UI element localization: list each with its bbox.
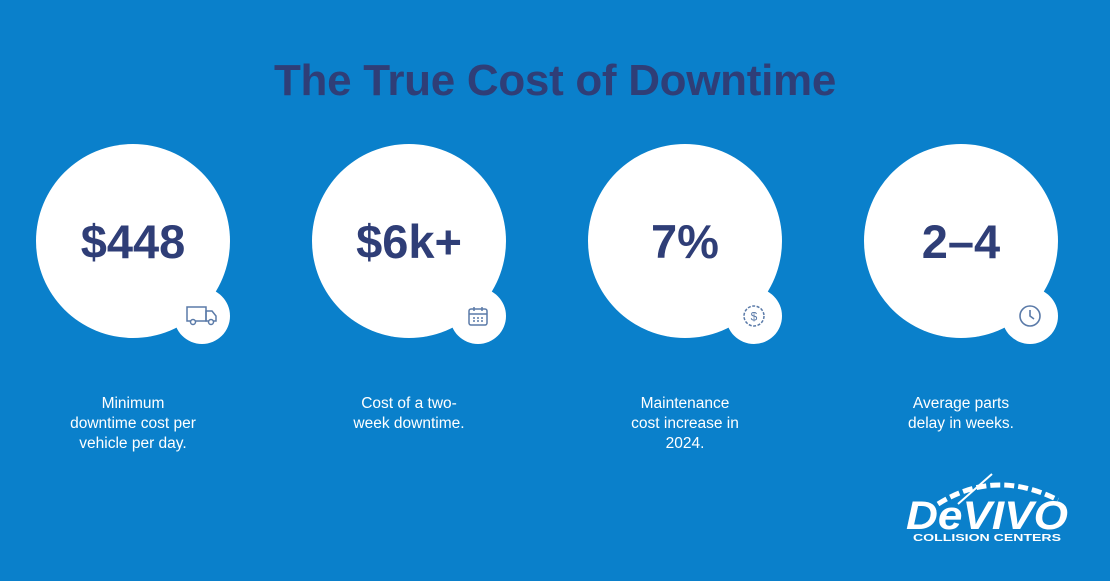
number circle bbox=[36, 144, 230, 338]
label: week downtime. bbox=[353, 415, 465, 432]
label: cost increase in bbox=[631, 415, 739, 432]
number circle: 7% bbox=[651, 214, 719, 268]
label: Maintenance bbox=[641, 395, 729, 412]
title: The True Cost of Downtime bbox=[274, 56, 836, 105]
number circle bbox=[864, 144, 1058, 338]
number circle bbox=[312, 144, 506, 338]
label bbox=[908, 395, 1014, 432]
logo: DeVIVO bbox=[906, 494, 1068, 538]
icon: dollar coin: $ bbox=[751, 310, 758, 324]
label bbox=[353, 395, 465, 432]
number circle: $448 bbox=[81, 214, 185, 268]
label bbox=[631, 395, 739, 452]
stat: 2-4 bbox=[864, 144, 1058, 432]
number circle: 2–4 bbox=[922, 214, 1000, 268]
number circle: $6k+ bbox=[356, 214, 462, 268]
label: Minimum bbox=[102, 395, 164, 412]
icon: truck bbox=[174, 288, 230, 344]
stat: $448 bbox=[36, 144, 230, 452]
label: vehicle per day. bbox=[79, 435, 187, 452]
stat: 7% bbox=[588, 144, 782, 452]
stat: $6k+ bbox=[312, 144, 506, 432]
label: 2024. bbox=[666, 435, 704, 452]
label: delay in weeks. bbox=[908, 415, 1014, 432]
icon: dollar coin bbox=[726, 288, 782, 344]
number circle bbox=[588, 144, 782, 338]
label bbox=[70, 395, 196, 452]
label: Cost of a two- bbox=[361, 395, 457, 412]
icon: calendar bbox=[450, 288, 506, 344]
icon: clock bbox=[1002, 288, 1058, 344]
label: Average parts bbox=[913, 395, 1009, 412]
label: downtime cost per bbox=[70, 415, 196, 432]
logo: COLLISION CENTERS bbox=[913, 533, 1061, 544]
logo bbox=[906, 473, 1068, 544]
